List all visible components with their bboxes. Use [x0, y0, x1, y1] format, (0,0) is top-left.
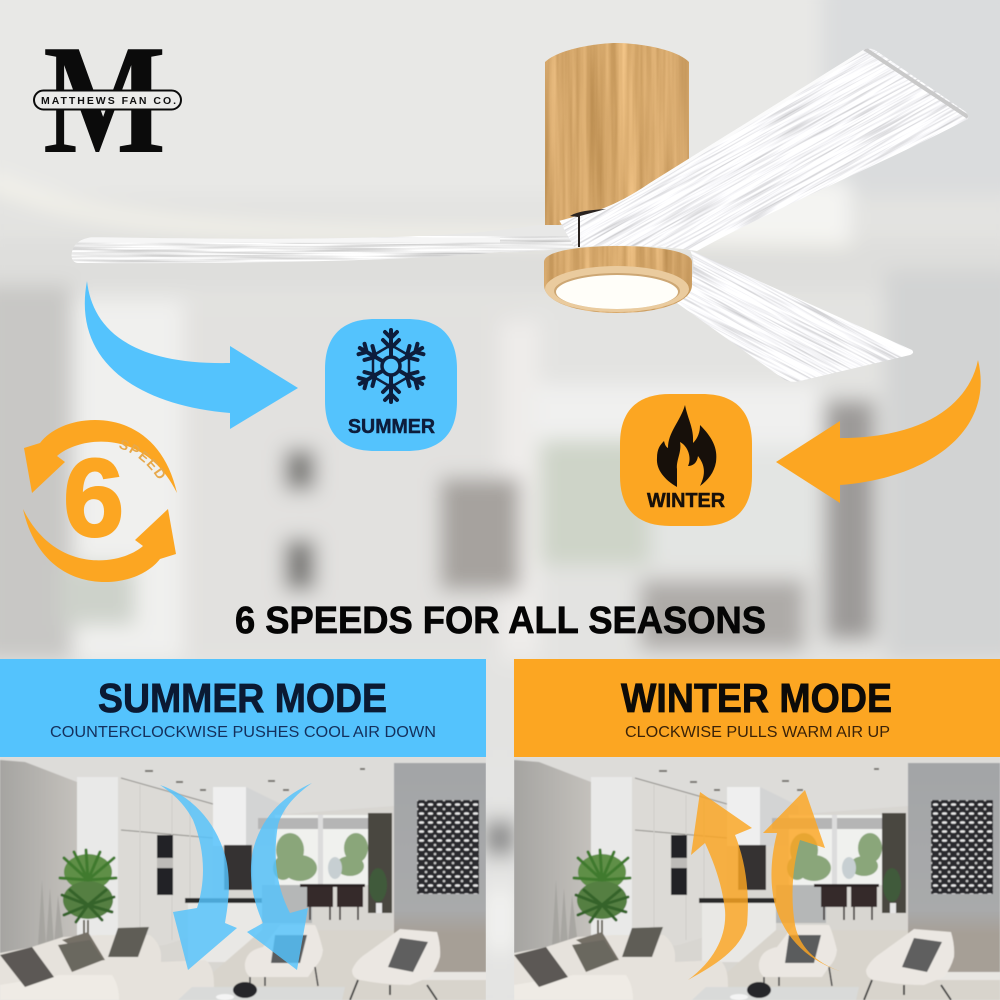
summer room photo: [0, 757, 486, 1000]
summer heading: SUMMER MODE: [98, 675, 387, 721]
logo: Matthews Fan Co.: [34, 13, 181, 187]
upper rotation arrow: [24, 420, 177, 493]
badge background: [620, 394, 752, 526]
winter room photo: [514, 757, 1000, 1000]
panel: summer mode: [0, 659, 486, 1000]
number 6: 6: [63, 437, 124, 560]
logo name pill: MATTHEWS FAN CO.: [41, 95, 176, 107]
summer air arrows: [160, 783, 312, 970]
winter air arrows: [688, 790, 845, 980]
motor connector: [570, 209, 606, 247]
icon: summer badge: [325, 319, 457, 451]
summer description: COUNTERCLOCKWISE PUSHES COOL AIR DOWN: [50, 724, 436, 741]
main blades: [60, 0, 1000, 372]
badge background: [325, 319, 457, 451]
LED light: [556, 275, 678, 309]
winter heading: WINTER MODE: [621, 675, 892, 721]
winter description: CLOCKWISE PULLS WARM AIR UP: [625, 724, 890, 741]
left down arrow: [160, 785, 237, 970]
panel: winter mode: [514, 659, 1000, 1000]
wood light ring: [544, 246, 692, 313]
icon: winter badge: [620, 394, 752, 526]
winter label: WINTER: [647, 490, 726, 512]
wood canopy: [545, 43, 689, 225]
icon: flame: [657, 405, 716, 487]
arrow: summer airflow: [85, 281, 298, 429]
logo name pill: [34, 90, 181, 110]
left up arrow: [688, 792, 752, 980]
winter header bar: [514, 659, 1000, 757]
lower blade: [677, 250, 913, 382]
summer label: SUMMER: [348, 416, 436, 438]
curved speed label: SPEED: [119, 440, 165, 478]
icon: snowflake: [356, 330, 426, 402]
title: 6 SPEEDS FOR ALL SEASONS: [235, 600, 766, 642]
right down arrow: [247, 783, 312, 970]
summer header bar: [0, 659, 486, 757]
ceiling fan: [60, 0, 1000, 497]
icon: 6 speed badge: [23, 420, 177, 582]
arrow: winter airflow: [776, 360, 981, 503]
logo monogram: M: [43, 13, 166, 187]
right up arrow: [763, 790, 845, 973]
lower rotation arrow: [23, 509, 176, 582]
